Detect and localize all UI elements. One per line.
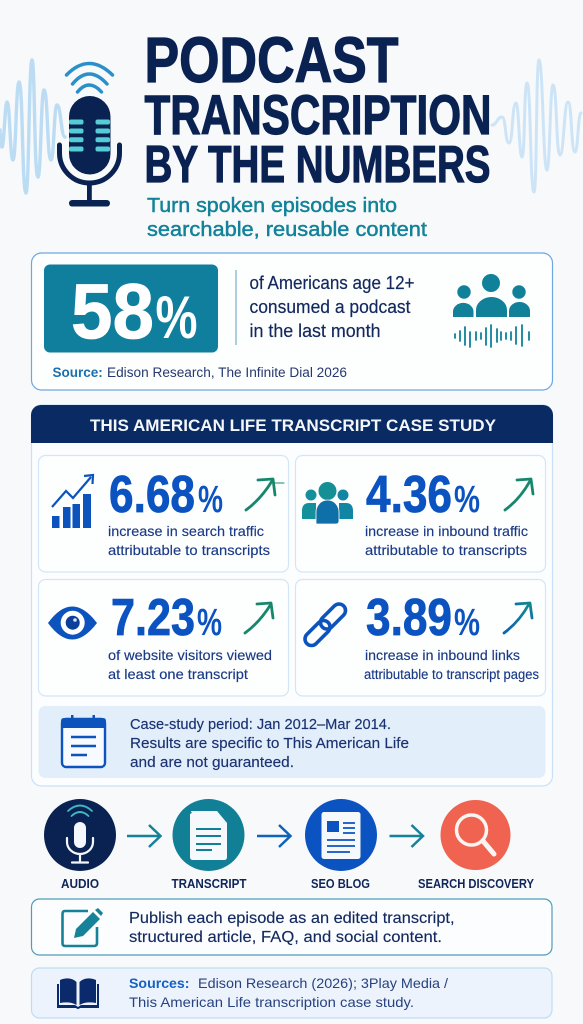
- description: attributable to transcript pages: [364, 667, 539, 682]
- value 3.89%: 3.89: [366, 589, 452, 647]
- description: [364, 647, 539, 682]
- panel: sources: [32, 968, 552, 1018]
- icon: microphone: [60, 64, 120, 206]
- card: website visitors: [38, 580, 288, 696]
- arrow: [127, 825, 160, 847]
- card: search traffic: [38, 456, 288, 572]
- source line: Source:: [52, 365, 103, 380]
- stat box: %: [156, 284, 198, 351]
- stat description: of Americans age 12+: [250, 273, 414, 293]
- subtitle: Turn spoken episodes into: [147, 195, 397, 217]
- value 3.89%: %: [454, 602, 480, 644]
- callout text: structured article, FAQ, and social content.: [129, 929, 442, 946]
- step: search discovery: SEARCH DISCOVERY: [418, 877, 535, 891]
- flow: audio to search discovery: [44, 799, 535, 891]
- stat description: in the last month: [250, 321, 380, 341]
- description: attributable to transcripts: [108, 542, 270, 558]
- step: transcript: TRANSCRIPT: [172, 877, 247, 891]
- description: of website visitors viewed: [108, 647, 272, 663]
- subtitle: [147, 195, 427, 241]
- icon: calendar: [61, 715, 106, 767]
- panel: 58 percent statistic: [32, 253, 552, 390]
- arrow up: [246, 479, 284, 510]
- sources text: This American Life transcription case study.: [129, 995, 414, 1010]
- stat description: [250, 273, 414, 341]
- sources text: Edison Research (2026); 3Play Media /: [198, 976, 448, 991]
- icon: audience with sound wave: [453, 274, 530, 347]
- stat box: [44, 264, 218, 355]
- description: increase in inbound links: [365, 647, 520, 663]
- value 4.36%: 4.36: [366, 466, 452, 524]
- arrow: [390, 825, 423, 847]
- arrow up: [504, 603, 532, 633]
- note text: [130, 717, 409, 771]
- icon: pencil and note: [62, 908, 103, 946]
- description: increase in inbound traffic: [365, 523, 528, 539]
- title: PODCAST: [144, 24, 398, 96]
- value 6.68%: %: [198, 479, 223, 521]
- source line: Edison Research, The Infinite Dial 2026: [107, 365, 347, 380]
- subtitle: searchable, reusable content: [147, 219, 427, 241]
- stat description: consumed a podcast: [250, 297, 410, 317]
- callout text: [129, 910, 454, 946]
- note text: Results are specific to This American Life: [130, 736, 409, 752]
- card: inbound links: [296, 580, 546, 696]
- description: at least one transcript: [108, 666, 248, 682]
- description: attributable to transcripts: [365, 542, 527, 558]
- right sound wave: [492, 60, 581, 192]
- left sound wave: [0, 60, 65, 193]
- title: [144, 24, 492, 194]
- description: [108, 523, 270, 558]
- value 7.23%: 7.23: [111, 589, 195, 647]
- value 4.36%: %: [454, 479, 480, 521]
- sources text: [129, 976, 448, 1010]
- arrow: [257, 825, 290, 847]
- description: increase in search traffic: [108, 523, 264, 539]
- step: search discovery: [418, 800, 535, 891]
- value 7.23%: %: [197, 602, 222, 644]
- arrow up: [505, 479, 533, 510]
- sources text: Sources:: [129, 976, 190, 991]
- value 6.68%: 6.68: [109, 466, 195, 524]
- case study header: [31, 405, 553, 443]
- callout text: Publish each episode as an edited transcript,: [129, 910, 454, 927]
- icon: eye: [48, 606, 97, 640]
- card: inbound traffic: [296, 456, 546, 572]
- description: [108, 647, 272, 682]
- stat box: 58: [71, 267, 154, 355]
- step: audio: AUDIO: [61, 877, 99, 891]
- step: transcript: [172, 799, 247, 891]
- icon: growth chart: [52, 475, 93, 528]
- icon: group of people: [302, 482, 353, 524]
- panel: case study: [31, 405, 553, 786]
- icon: chain link: [302, 601, 348, 648]
- description: [365, 523, 528, 558]
- case study header: THIS AMERICAN LIFE TRANSCRIPT CASE STUDY: [90, 417, 496, 435]
- step: SEO blog: [305, 799, 377, 891]
- arrow up: [245, 603, 273, 633]
- step: SEO blog: SEO BLOG: [311, 877, 370, 891]
- callout: publish each episode: [32, 899, 552, 955]
- step: audio: [44, 799, 116, 891]
- note text: Case-study period: Jan 2012–Mar 2014.: [130, 717, 391, 733]
- note text: and are not guaranteed.: [130, 755, 294, 771]
- icon: open book: [57, 978, 99, 1009]
- note: case-study period: [38, 706, 546, 778]
